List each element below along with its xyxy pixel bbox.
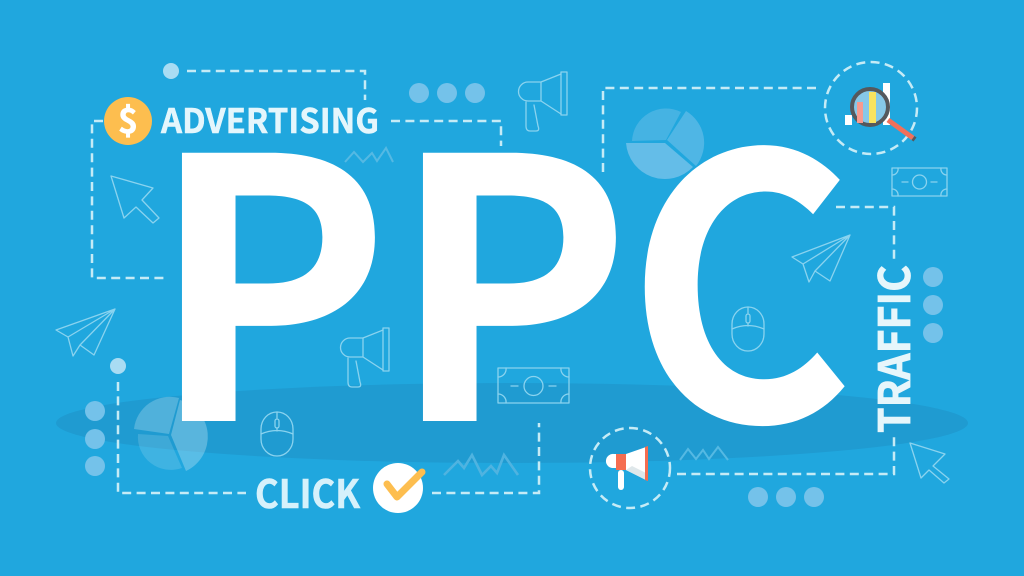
- icon: cursor bottom right: [910, 443, 949, 483]
- title: PPC: [149, 0, 854, 527]
- decorative dots: top: [409, 83, 485, 103]
- dashed connectors: [92, 71, 894, 493]
- icon: zigzag small bottom right: [680, 447, 728, 460]
- icon: banknote lower: [498, 368, 569, 403]
- dot: lower left connector: [110, 358, 126, 374]
- badge: check mark: [373, 463, 423, 513]
- dot: top connector: [163, 63, 179, 79]
- decorative dots: right: [923, 267, 943, 343]
- icon: cursor top left: [111, 176, 159, 223]
- icon: megaphone upper: [518, 72, 567, 131]
- icon: mouse upper: [732, 307, 764, 351]
- pie chart: bottom left: [134, 397, 208, 471]
- label: CLICK: CLICK: [255, 464, 360, 520]
- icon: paper plane left: [56, 309, 115, 356]
- title: PPC: P: [390, 2, 631, 526]
- icon: magnifier over bar chart: [825, 62, 917, 154]
- icon: megaphone lower: [340, 328, 389, 387]
- title: PPC: C: [626, 0, 854, 527]
- decorative dots: bottom: [748, 487, 824, 507]
- badge: dollar coin: $: [118, 94, 138, 143]
- icon: megaphone in dashed circle: [590, 428, 670, 508]
- icon: mouse lower: [261, 412, 293, 456]
- decorative dots: left: [85, 401, 105, 476]
- badge: dollar coin: [104, 94, 152, 145]
- title: PPC: P: [149, 2, 390, 526]
- icon: zigzag top: [345, 148, 393, 162]
- icon: banknote upper: [892, 168, 947, 196]
- label: TRAFFIC: TRAFFIC: [861, 265, 923, 433]
- icon: paper plane right: [792, 235, 850, 282]
- icon: zigzag bottom: [444, 455, 518, 475]
- pie chart: top right: [626, 108, 704, 179]
- label: ADVERTISING: ADVERTISING: [160, 94, 379, 143]
- floor shadow ellipse: [56, 383, 968, 463]
